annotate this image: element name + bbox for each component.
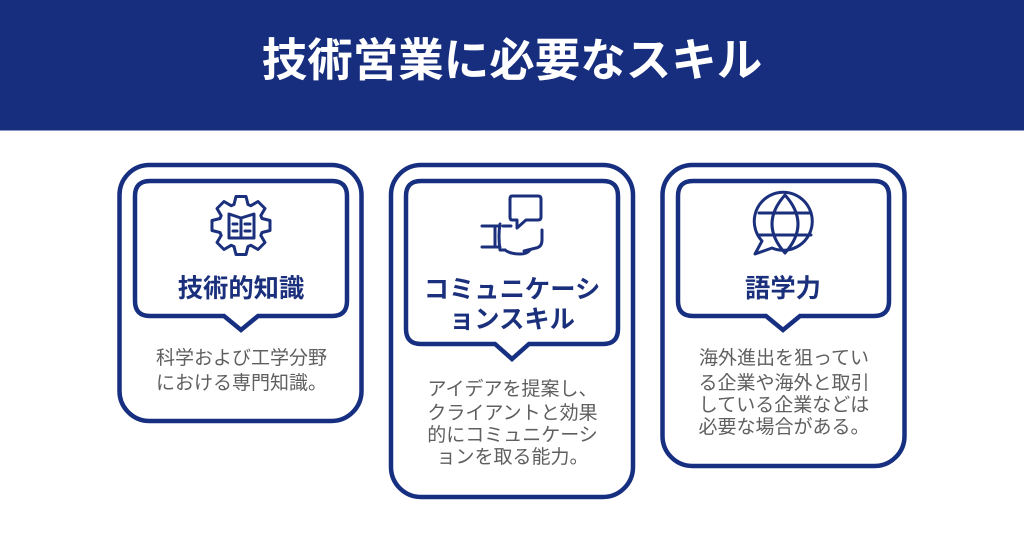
heading: ョンスキル (449, 306, 575, 334)
heading: 技術的知識 (178, 275, 304, 303)
description: る企業や海外と取引 (698, 372, 870, 394)
card outline (391, 165, 633, 497)
description: アイデアを提案し、 (427, 378, 598, 400)
description: している企業などは (699, 394, 869, 416)
description (156, 347, 327, 394)
card outline (120, 165, 362, 421)
speech bubble (135, 181, 347, 330)
description: クライアントと効果 (427, 402, 598, 424)
description (698, 347, 870, 438)
description: 科学および工学分野 (156, 347, 327, 369)
description: 的にコミュニケーシ (427, 424, 598, 446)
panel: communication skills (391, 165, 633, 497)
description: 必要な場合がある。 (698, 416, 870, 438)
heading (424, 276, 600, 334)
description: 海外進出を狙ってい (699, 347, 869, 369)
icon: gear with book (212, 196, 270, 254)
heading: コミュニケーシ (424, 276, 600, 304)
speech bubble (406, 181, 618, 359)
icon: globe speech bubble (754, 192, 812, 254)
description: における専門知識。 (156, 372, 327, 394)
speech bubble (678, 181, 889, 330)
card outline (662, 165, 904, 466)
panel: technical knowledge (120, 165, 362, 421)
description (427, 378, 598, 468)
description: ョンを取る能力。 (436, 446, 589, 468)
panel: language skills (662, 165, 904, 466)
header banner (0, 0, 1024, 130)
icon: handshake with speech bubble (482, 196, 542, 254)
heading: 語学力 (745, 275, 821, 303)
title: 技術営業に必要なスキル (262, 35, 762, 86)
